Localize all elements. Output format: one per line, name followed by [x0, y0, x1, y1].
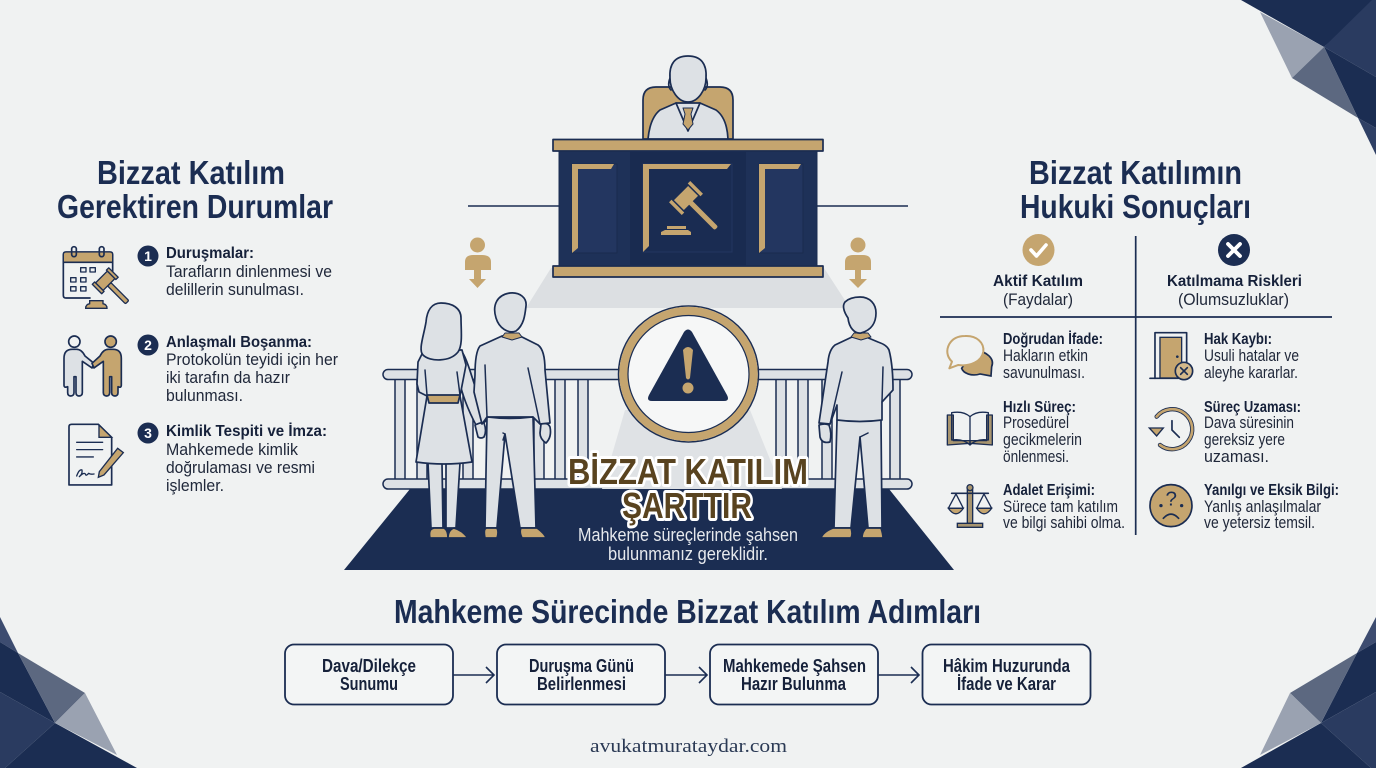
icon: cross badge	[1218, 234, 1250, 266]
item 3 text	[166, 422, 327, 495]
item 1 text: Tarafların dinlenmesi ve	[166, 263, 332, 281]
icon: door with cross	[1150, 333, 1193, 380]
benefit 1 text: Doğrudan İfade:	[1003, 330, 1103, 348]
item 3 text: Kimlik Tespiti ve İmza:	[166, 422, 327, 440]
icon: confused face: ?	[1166, 487, 1177, 510]
figure: woman seen from behind	[416, 303, 486, 538]
risk 1 text: Usuli hatalar ve	[1204, 347, 1299, 365]
number badge 1	[138, 246, 158, 266]
corner decoration: bottom left	[0, 617, 137, 768]
step 1 box: Dava/Dilekçe	[322, 656, 416, 676]
decorative side lines	[468, 205, 908, 207]
right column heading	[1020, 154, 1251, 225]
light beam under bench	[526, 268, 850, 308]
benefit 3 text: Adalet Erişimi:	[1003, 482, 1095, 499]
benefit 2 text: Prosedürel	[1003, 414, 1069, 432]
bench panel center	[643, 164, 732, 252]
figure: man right seen from behind	[819, 297, 893, 538]
icon: person with down arrow right	[845, 238, 871, 288]
icon: speech bubbles	[947, 336, 992, 376]
left column heading	[57, 154, 333, 225]
central headline: ŞARTTIR	[622, 485, 752, 526]
column heading: active participation: Aktif Katılım	[993, 273, 1083, 290]
light beam under warning sign	[602, 410, 782, 489]
benefit 3 text: ve bilgi sahibi olma.	[1003, 514, 1125, 532]
step 2 box: Belirlenmesi	[537, 674, 626, 694]
icon: check badge	[1022, 234, 1054, 266]
icon: open book	[947, 412, 992, 445]
icon: person with down arrow left	[465, 238, 491, 288]
footer website: avukatmurataydar.com	[590, 736, 787, 757]
step 4 box: İfade ve Karar	[957, 674, 1056, 694]
item 1 text	[166, 245, 332, 299]
central headline	[568, 451, 808, 526]
central headline: BİZZAT KATILIM	[568, 451, 808, 492]
risk 3 text: ve yetersiz temsil.	[1204, 514, 1315, 532]
corner decoration: bottom right	[1241, 617, 1376, 768]
icon: handshake people	[64, 336, 121, 396]
benefit 2 text	[1003, 399, 1082, 466]
risk 2 text: gereksiz yere	[1204, 431, 1285, 449]
item 1 text: Duruşmalar:	[166, 245, 254, 262]
table dividers	[940, 236, 1332, 535]
risk 2 text: Dava süresinin	[1204, 414, 1294, 432]
risk 1 text: Hak Kaybı:	[1204, 331, 1272, 348]
benefit 2 text: gecikmelerin	[1003, 431, 1082, 449]
column heading: non-attendance risks: Katılmama Riskleri	[1167, 273, 1302, 290]
risk 3 text: Yanlış anlaşılmalar	[1204, 498, 1321, 516]
steps heading: Mahkeme Sürecinde Bizzat Katılım Adımları	[394, 593, 981, 630]
number badge 2: 2	[144, 337, 152, 353]
right column heading: Hukuki Sonuçları	[1020, 188, 1251, 225]
benefit 2 text: önlenmesi.	[1003, 448, 1069, 466]
figure: man center-left seen from behind	[474, 293, 550, 538]
warning sign	[618, 306, 758, 442]
icon: clock with back arrow	[1149, 409, 1192, 449]
benefit 2 text: Hızlı Süreç:	[1003, 399, 1076, 416]
benefit 1 text	[1003, 330, 1103, 382]
arrow 3	[878, 667, 919, 683]
step 4 box	[922, 644, 1090, 704]
central subtext: bulunmanız gereklidir.	[608, 543, 768, 564]
step 3 box	[710, 644, 878, 704]
bench panel right	[759, 164, 803, 253]
central subtext	[578, 524, 798, 564]
item 2 text	[166, 334, 338, 405]
item 2 text: iki tarafın da hazır	[166, 369, 290, 387]
benefit 1 text: savunulması.	[1003, 364, 1085, 382]
step 4 box: Hâkim Huzurunda	[943, 656, 1071, 676]
arrow 2	[665, 667, 707, 683]
benefit 1 text: Hakların etkin	[1003, 347, 1088, 365]
icon: confused face	[1150, 485, 1192, 527]
risk 3 text: Yanılgı ve Eksik Bilgi:	[1204, 482, 1339, 499]
column heading: active participation	[993, 273, 1083, 309]
icon: scales of justice	[948, 485, 992, 527]
judge figure	[643, 56, 733, 139]
risk 1 text	[1204, 331, 1299, 382]
judge bench	[553, 140, 823, 277]
step 3 box: Mahkemede Şahsen	[723, 656, 866, 676]
risk 2 text: Süreç Uzaması:	[1204, 399, 1301, 416]
item 1 text: delillerin sunulması.	[166, 281, 304, 299]
courtroom floor carpet	[344, 489, 954, 570]
risk 2 text	[1204, 399, 1301, 466]
risk 2 text: uzaması.	[1204, 448, 1269, 466]
risk 3 text	[1204, 482, 1339, 532]
step 3 box: Hazır Bulunma	[741, 674, 847, 694]
benefit 3 text: Sürece tam katılım	[1003, 498, 1118, 516]
number badge 3: 3	[144, 425, 152, 441]
step 2 box	[497, 644, 665, 704]
bench panel left	[572, 164, 617, 253]
right column heading: Bizzat Katılımın	[1029, 154, 1242, 191]
benefit 3 text	[1003, 482, 1125, 532]
railing	[383, 370, 912, 489]
risk 1 text: aleyhe kararlar.	[1204, 364, 1298, 382]
item 2 text: Protokolün teyidi için her	[166, 351, 338, 369]
icon: calendar and gavel	[63, 247, 135, 311]
corner decoration: top right	[1241, 0, 1376, 155]
step 2 box: Duruşma Günü	[529, 656, 634, 676]
item 3 text: doğrulaması ve resmi	[166, 459, 315, 477]
step 1 box	[285, 644, 453, 704]
left column heading: Gerektiren Durumlar	[57, 188, 333, 225]
number badge 2	[138, 334, 158, 356]
column heading: active participation: (Faydalar)	[1003, 291, 1073, 309]
arrow 1	[453, 667, 494, 683]
left column heading: Bizzat Katılım	[97, 154, 285, 191]
step 1 box: Sunumu	[340, 674, 398, 694]
central subtext: Mahkeme süreçlerinde şahsen	[578, 524, 798, 545]
item 2 text: bulunması.	[166, 387, 243, 405]
item 2 text: Anlaşmalı Boşanma:	[166, 334, 312, 351]
number badge 3	[138, 422, 158, 444]
icon: signed document	[69, 424, 123, 485]
column heading: non-attendance risks	[1167, 273, 1302, 309]
item 3 text: işlemler.	[166, 477, 224, 495]
number badge 1: 1	[144, 248, 152, 264]
item 3 text: Mahkemede kimlik	[166, 441, 299, 459]
icon: gavel on bench	[661, 181, 727, 239]
column heading: non-attendance risks: (Olumsuzluklar)	[1178, 291, 1289, 309]
